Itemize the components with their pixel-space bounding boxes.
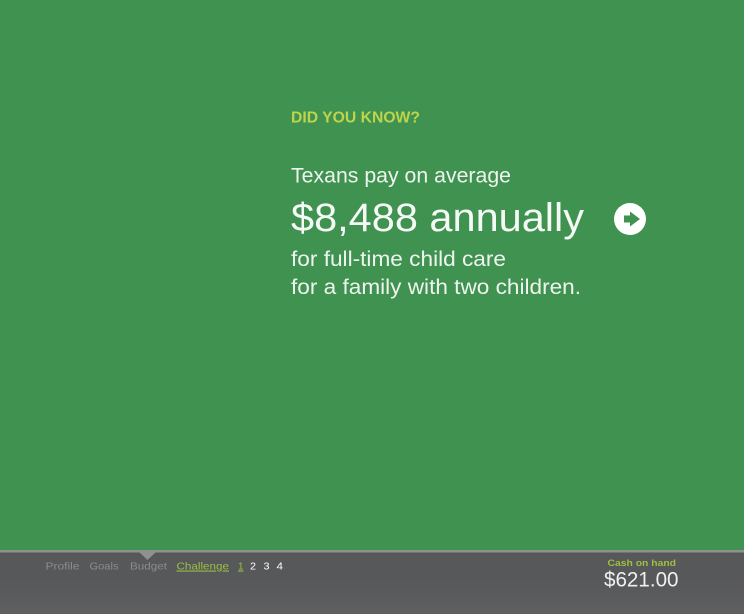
cash on hand label: Cash on hand (608, 558, 676, 569)
challenge page 3: 3 (264, 560, 270, 572)
step: profile: Profile (46, 560, 80, 572)
icon: next arrow button (614, 203, 646, 235)
progress marker triangle (139, 552, 156, 560)
challenge page 1: 1 (238, 560, 244, 572)
highlighted amount: $8,488 annually (291, 196, 584, 240)
step: challenge: Challenge (176, 560, 229, 572)
step: budget: Budget (130, 560, 167, 572)
detail line two: for a family with two children. (291, 276, 581, 299)
detail line one: for full-time child care (291, 248, 506, 271)
challenge page 2: 2 (250, 560, 256, 572)
challenge page 4: 4 (276, 560, 283, 572)
intro line: Texans pay on average (291, 164, 511, 188)
navigation steps (46, 560, 283, 572)
step: goals: Goals (90, 560, 118, 572)
heading: did you know: DID YOU KNOW? (291, 110, 420, 126)
cash on hand amount: $621.00 (604, 568, 679, 592)
footer bar (0, 550, 744, 614)
fact text block (291, 164, 584, 299)
